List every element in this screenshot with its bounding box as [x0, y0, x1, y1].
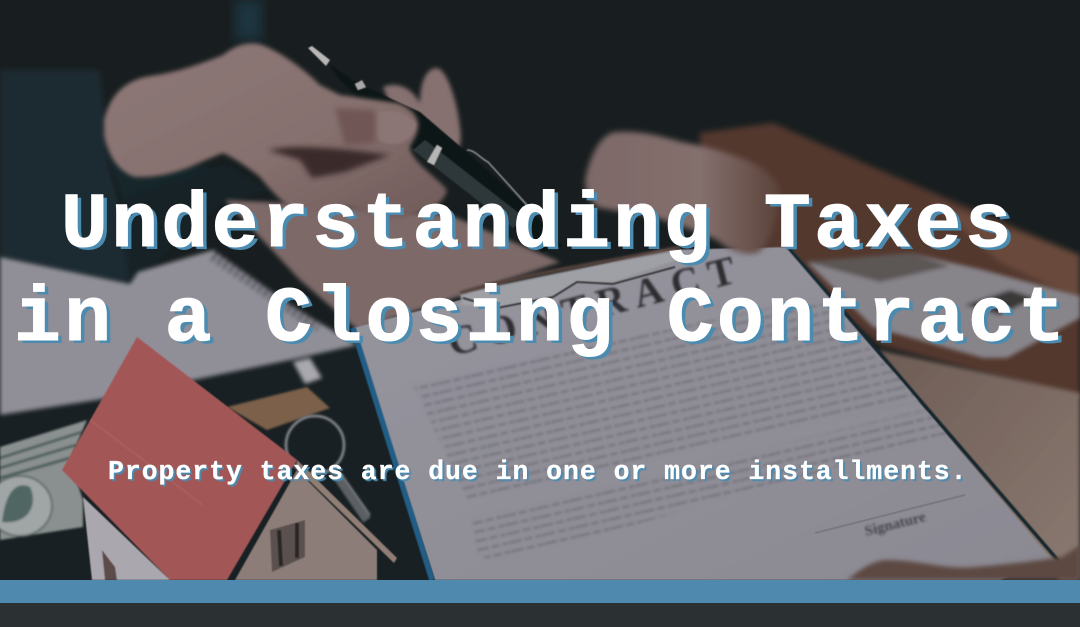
right hand [585, 132, 780, 254]
contract document [353, 247, 1062, 580]
wood block [227, 387, 330, 430]
signature line [815, 495, 965, 533]
house roof [62, 337, 297, 580]
title [14, 182, 1068, 364]
contract body text block [413, 298, 962, 562]
calculator [807, 253, 1080, 358]
title: Understanding Taxes [61, 182, 1015, 270]
dark footer band [0, 603, 1080, 627]
wooden desk, right [700, 123, 1080, 400]
notebook paper, left [0, 250, 357, 415]
palm and thumb [104, 43, 447, 218]
house right wall [235, 470, 377, 580]
house windows [270, 520, 305, 572]
hand at bottom right [847, 545, 1080, 580]
beige paper, right of contract [878, 350, 1080, 580]
contract document: Signature [863, 509, 928, 540]
money [0, 420, 87, 540]
thumb nail [377, 111, 416, 144]
index and middle fingers [383, 68, 461, 150]
beige page under hand [225, 200, 560, 330]
left hand [104, 43, 562, 252]
title: in a Closing Contract [14, 276, 1068, 364]
clipboard clip [460, 249, 690, 308]
contract blue edge [353, 328, 432, 580]
subtitle: Property taxes are due in one or more installments. [108, 457, 967, 487]
pen [308, 46, 562, 252]
palm crease shadow [268, 147, 390, 178]
lower-left dark desk [0, 347, 440, 580]
toy house [62, 337, 397, 580]
contract right edge [788, 247, 1062, 565]
jacket sleeve [0, 70, 135, 285]
blue divider bar [0, 580, 1080, 603]
key ring [286, 416, 370, 520]
contract heading: CONTRACT [443, 247, 740, 365]
house left wall [83, 497, 170, 580]
